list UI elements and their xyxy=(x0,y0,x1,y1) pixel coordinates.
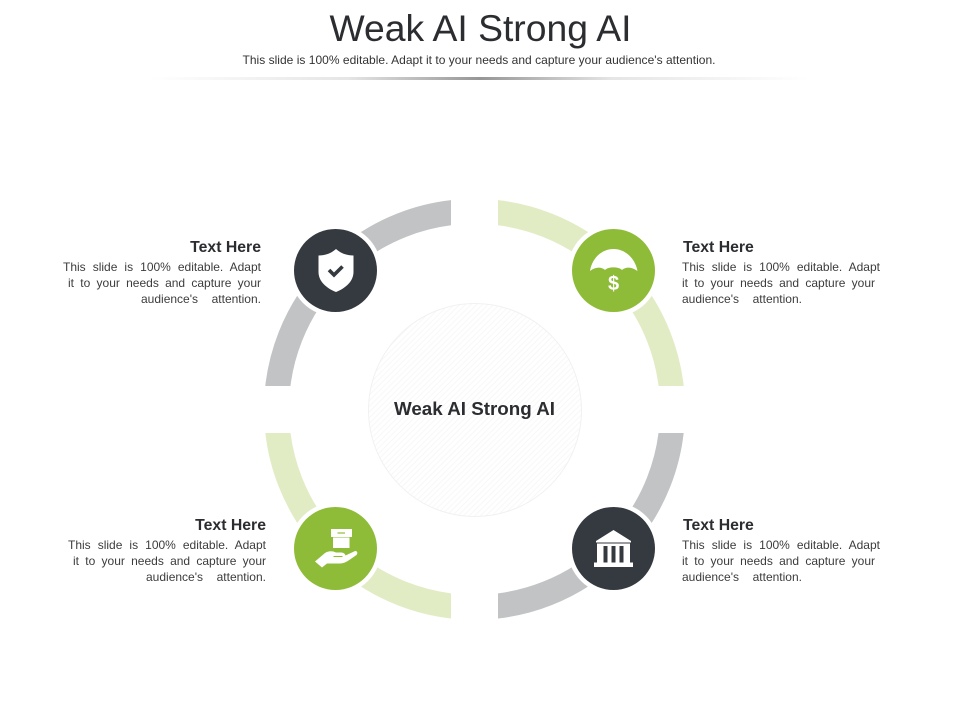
text block: top right: Text Here xyxy=(683,239,754,256)
center label: Weak AI Strong AI xyxy=(394,398,555,419)
center circle xyxy=(368,304,582,516)
icon: bank building xyxy=(568,502,660,594)
icon: hand holding box xyxy=(290,502,382,594)
subtitle: This slide is 100% editable. Adapt it to your needs and capture your audience's attention. xyxy=(242,53,716,67)
icon: umbrella with dollar xyxy=(568,224,660,316)
text block: top left: audience's attention. xyxy=(141,292,261,306)
text block: bottom right: it to your needs and capture your xyxy=(682,554,875,568)
text block: bottom left: This slide is 100% editable. Adapt xyxy=(68,538,266,552)
text block: top right: This slide is 100% editable. Adapt xyxy=(682,260,880,274)
text block: bottom left xyxy=(68,517,266,584)
text block: top right: it to your needs and capture your xyxy=(682,276,875,290)
ring arc: top right xyxy=(498,200,684,386)
text block: top right xyxy=(682,239,880,306)
text block: bottom right: Text Here xyxy=(683,517,754,534)
ring arc: top left xyxy=(265,200,451,386)
text block: bottom right xyxy=(682,517,880,584)
title: Weak AI Strong AI xyxy=(330,7,632,49)
icon: umbrella with dollar: $ xyxy=(608,273,619,295)
icon: shield with check xyxy=(290,224,382,316)
text block: bottom left: Text Here xyxy=(195,517,266,534)
ring arc: bottom right xyxy=(498,433,684,618)
ring arc: bottom left xyxy=(265,433,451,618)
text block: top right: audience's attention. xyxy=(682,292,802,306)
text block: bottom left: it to your needs and capture your xyxy=(73,554,266,568)
text block: top left: it to your needs and capture your xyxy=(68,276,261,290)
text block: bottom right: audience's attention. xyxy=(682,570,802,584)
text block: bottom right: This slide is 100% editable. Adapt xyxy=(682,538,880,552)
text block: top left: This slide is 100% editable. Adapt xyxy=(63,260,261,274)
text block: bottom left: audience's attention. xyxy=(146,570,266,584)
text block: top left xyxy=(63,239,261,306)
cycle diagram xyxy=(265,200,684,618)
text block: top left: Text Here xyxy=(190,239,261,256)
